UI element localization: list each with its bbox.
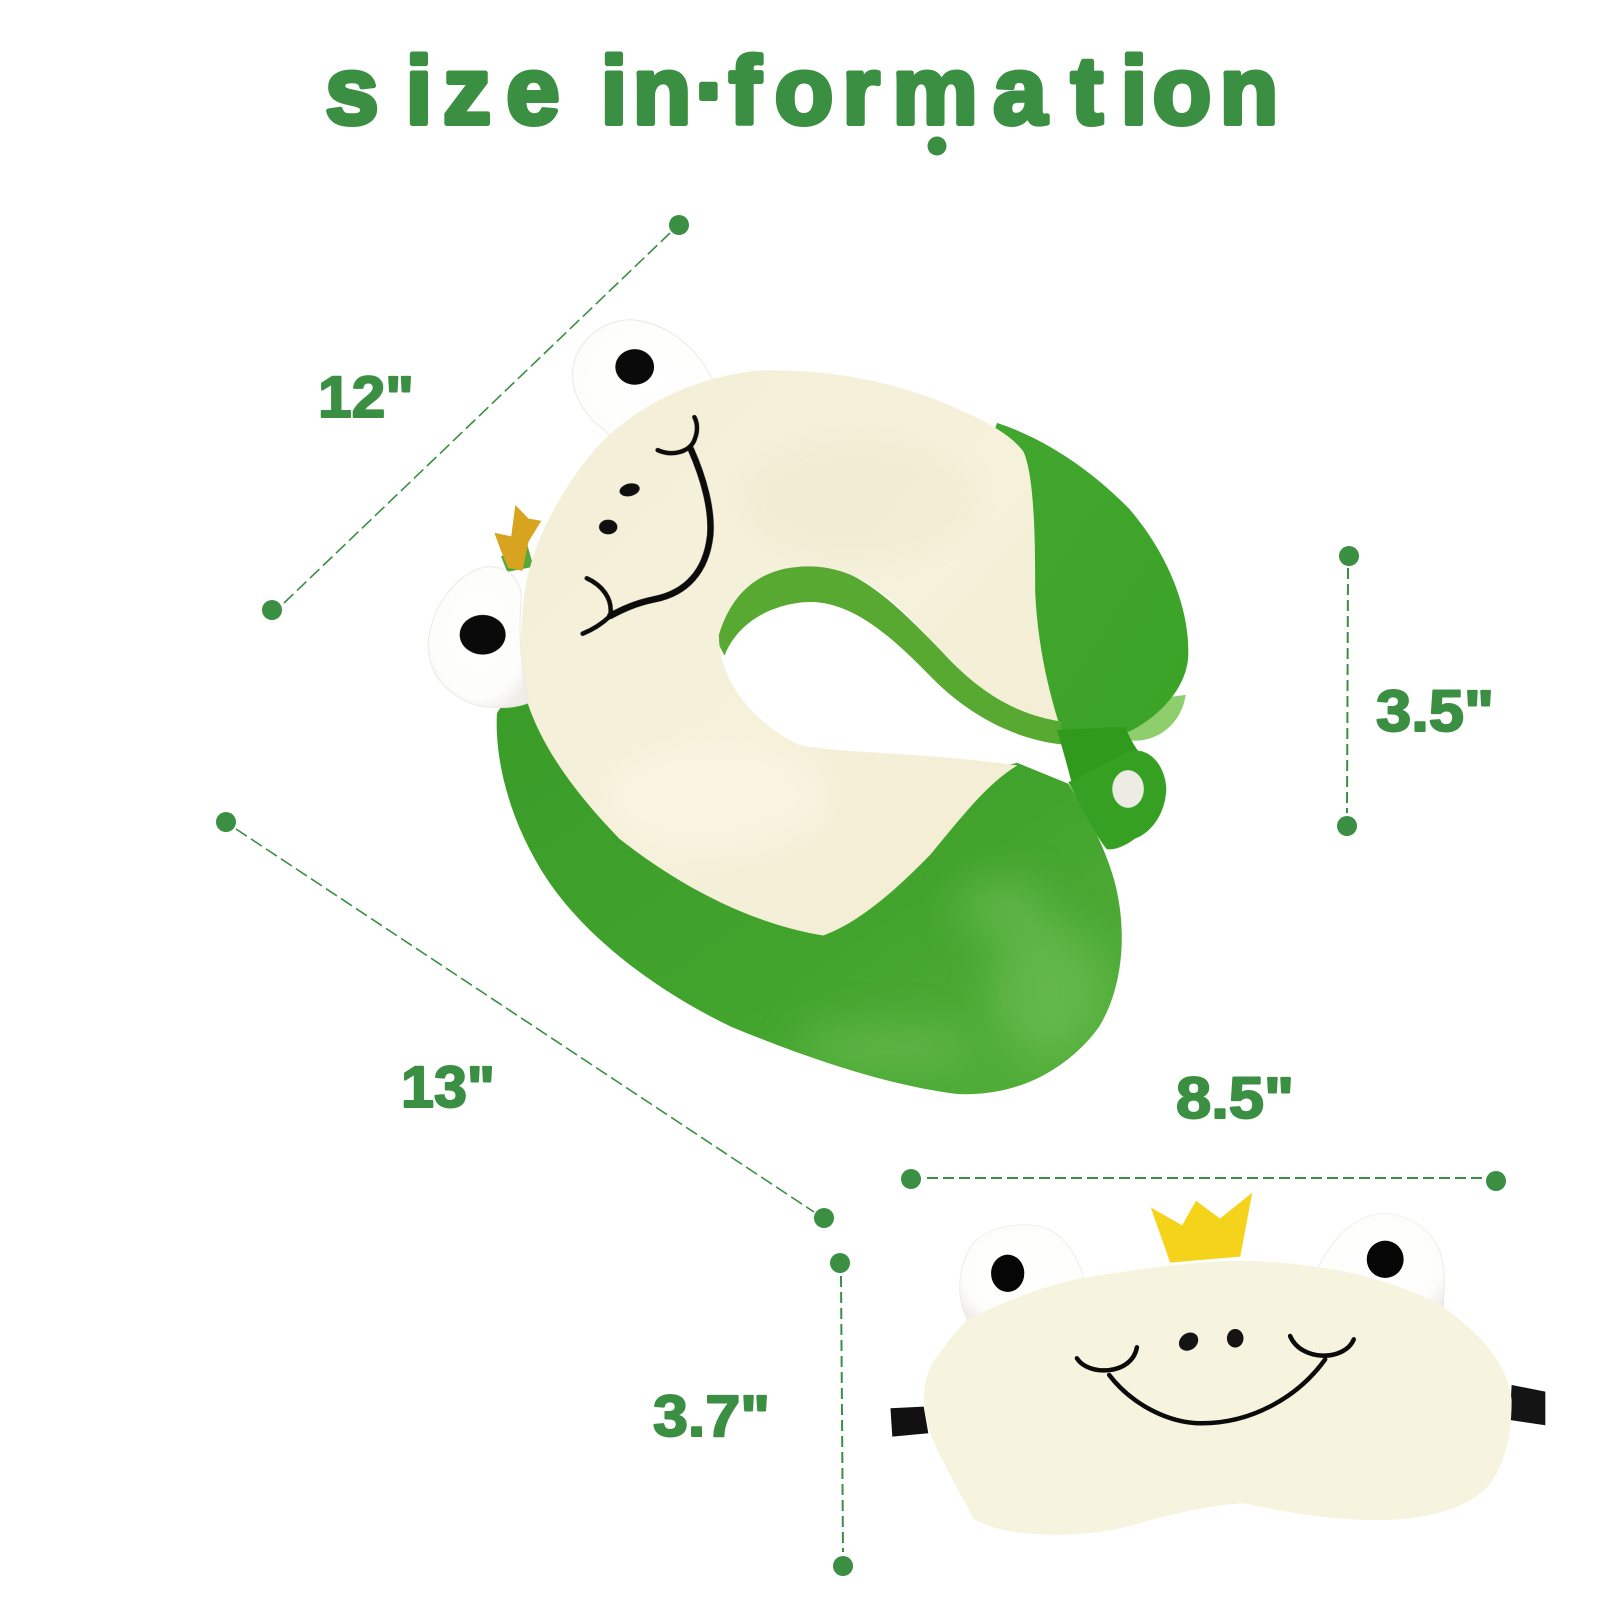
mask: left eye xyxy=(960,1225,1086,1327)
label: 12 inch: 12" xyxy=(318,365,414,430)
pillow: left eye xyxy=(428,567,529,707)
mask: crown xyxy=(1151,1193,1252,1263)
mask: right strap xyxy=(1510,1385,1545,1425)
pillow: cream top panel xyxy=(521,370,1058,935)
neck pillow illustration xyxy=(428,320,1188,1094)
dimension: mask height xyxy=(830,1253,853,1576)
mask: cream body xyxy=(924,1261,1512,1535)
pillow: nostrils xyxy=(599,482,641,534)
dimension: pillow 13 inch diagonal xyxy=(216,812,834,1228)
pillow: crown xyxy=(494,505,541,571)
mask: right eye xyxy=(1312,1213,1444,1320)
pillow: lighter green highlights xyxy=(793,881,1104,1069)
pillow: right green arm xyxy=(987,423,1188,734)
label: 8.5 inch: 8.5" xyxy=(1176,1066,1294,1131)
label: 3.5 inch: 3.5" xyxy=(1376,679,1494,744)
pillow: top eye xyxy=(572,320,727,457)
title: size in·formation xyxy=(325,38,1278,144)
pillow: inner hole rim xyxy=(716,564,1063,745)
mask: left strap xyxy=(890,1407,928,1437)
label: 3.7 inch: 3.7" xyxy=(653,1384,770,1449)
pillow: green patch behind crown xyxy=(501,546,534,572)
mask: nostrils xyxy=(1176,1329,1244,1353)
sleep mask illustration xyxy=(890,1193,1545,1535)
pillow: fastening tab strip xyxy=(1057,727,1141,789)
pillow: bottom green arm xyxy=(497,666,1122,1094)
pillow: cream shading xyxy=(604,441,971,854)
pillow: pale green end underside xyxy=(1124,695,1186,741)
dimension: pillow 12 inch diagonal xyxy=(262,215,689,620)
dimension: mask width xyxy=(901,1169,1506,1191)
pillow: fastening tab with snap xyxy=(1068,750,1166,849)
pillow: embroidered smile xyxy=(583,417,710,634)
dimension: pillow 3.5 inch height xyxy=(1337,546,1359,836)
label: 13 inch: 13" xyxy=(401,1055,495,1120)
mask: embroidered smile xyxy=(1077,1336,1354,1423)
